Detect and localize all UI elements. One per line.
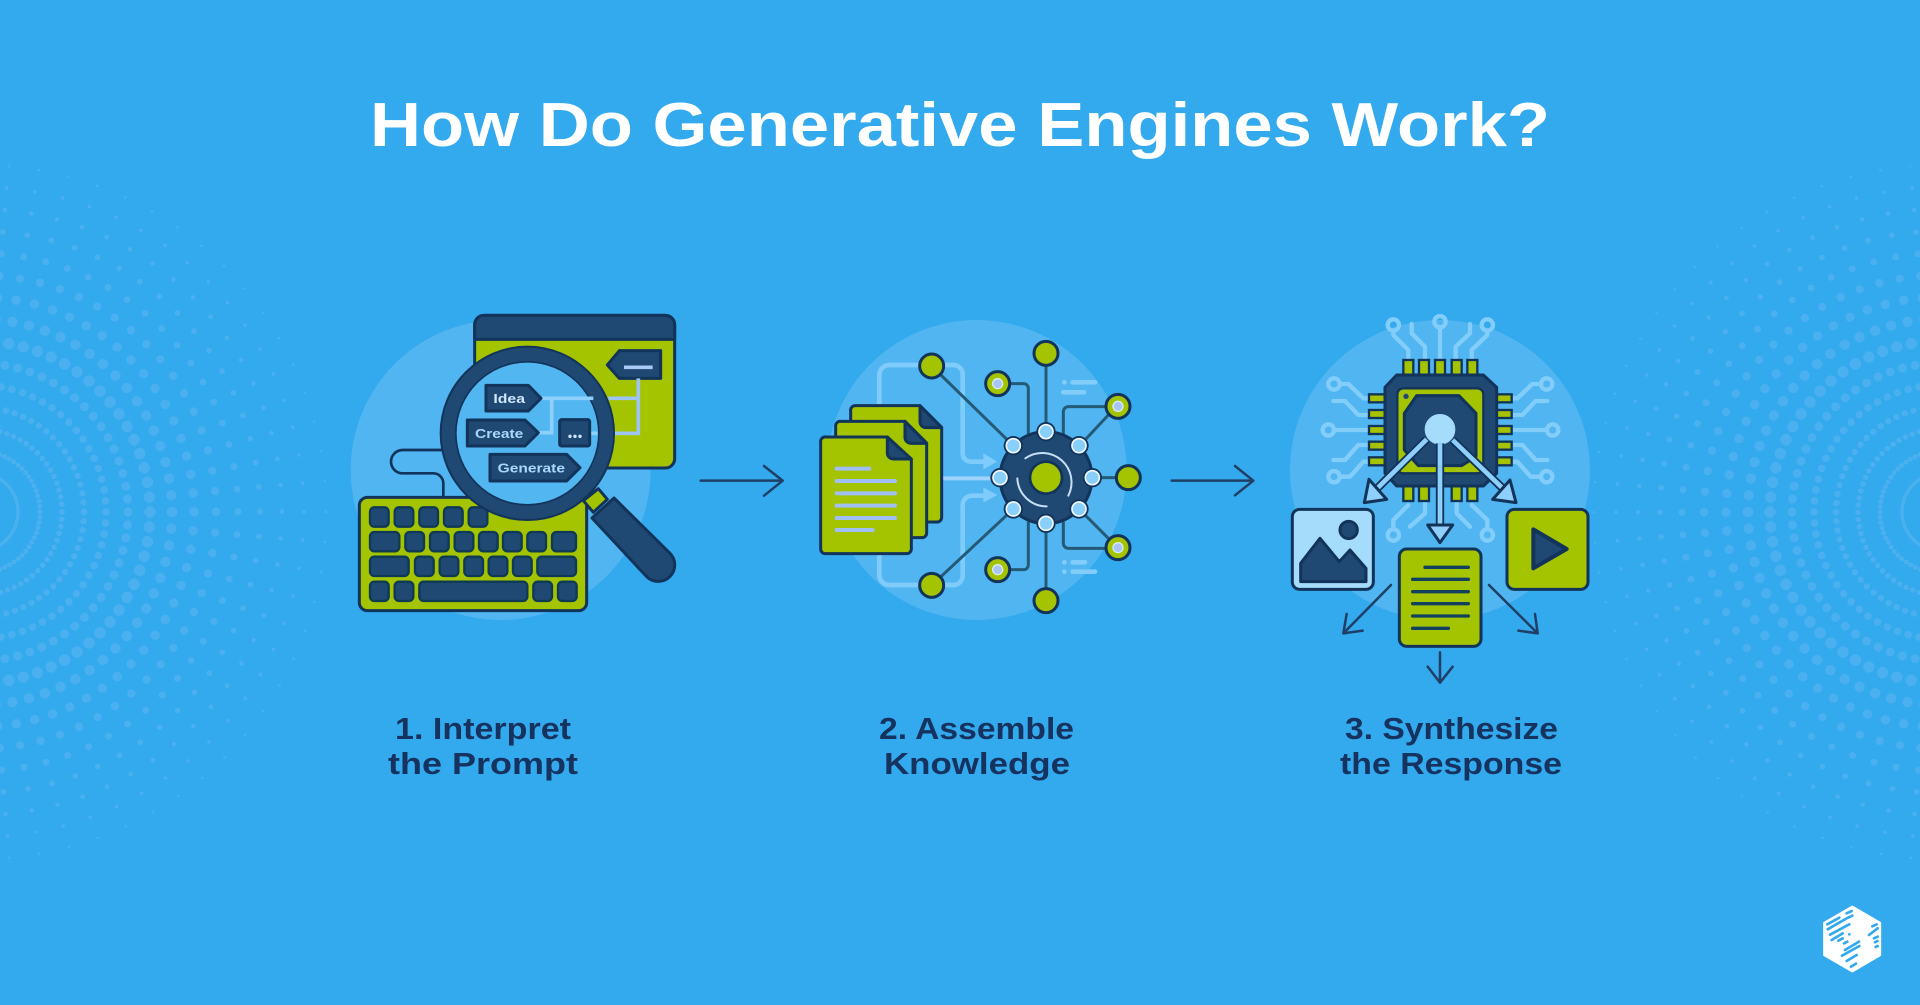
keyboard cable: [391, 450, 443, 498]
document stack: [821, 406, 942, 554]
tag: Idea: [486, 385, 541, 411]
label: step 3: [1340, 711, 1562, 781]
circuit traces: [1323, 316, 1558, 541]
hub gear: [990, 422, 1102, 533]
network connectors: [932, 353, 1128, 601]
tag: Create: Create: [475, 426, 523, 441]
network nodes: [920, 341, 1140, 613]
keyboard: [359, 497, 587, 611]
chip: [1369, 360, 1512, 501]
tag: ellipsis: [560, 420, 590, 446]
tag: Idea: Idea: [493, 392, 526, 406]
icon: documents connected to a knowledge hub: [821, 320, 1253, 620]
output arrow: down: [1428, 652, 1453, 683]
output arrow: lower right: [1489, 585, 1538, 633]
label: step 3: the Response: [1340, 746, 1562, 781]
light output arrows from chip: [1364, 439, 1516, 543]
small light detail lines: [1063, 382, 1095, 572]
label: step 1: 1. Interpret: [395, 711, 571, 746]
icon: keyboard, browser window and magnifier: [351, 315, 783, 620]
label: step 2: 2. Assemble: [879, 711, 1074, 746]
card: image: [1292, 509, 1373, 589]
light data flow paths: [879, 365, 997, 585]
card: video play: [1507, 509, 1588, 589]
card: text document: [1399, 549, 1481, 646]
title: How Do Generative Engines Work?: [370, 91, 1550, 160]
tag: Create: [467, 420, 538, 446]
icon: chip synthesizing image, text and video: [1290, 316, 1590, 683]
magnifier: [440, 346, 675, 581]
tag: Generate: [490, 454, 580, 481]
output arrow: lower left: [1343, 585, 1391, 633]
label: step 3: 3. Synthesize: [1345, 711, 1558, 746]
label: step 2: [879, 711, 1074, 781]
label: step 2: Knowledge: [884, 746, 1070, 781]
label: step 1: the Prompt: [388, 746, 578, 781]
arrow: step 1 to step 2: [701, 466, 783, 496]
label: step 1: [388, 711, 578, 781]
logo: hexagon cube: [1824, 906, 1880, 972]
browser window: [475, 315, 675, 468]
tag: Generate: Generate: [498, 461, 565, 476]
arrow: step 2 to step 3: [1172, 466, 1253, 495]
